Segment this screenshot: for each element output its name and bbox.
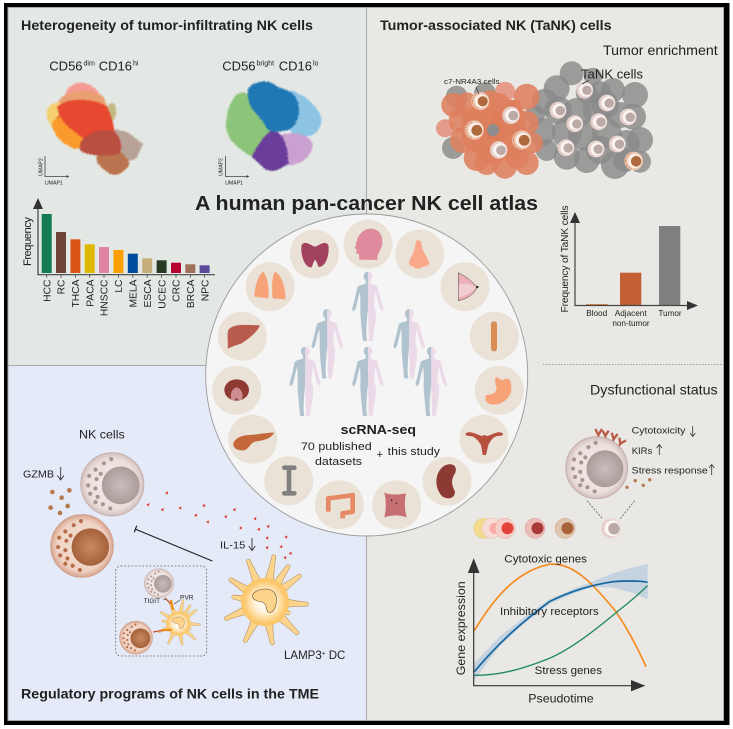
icon: nose <box>409 240 429 269</box>
heading: regulatory programs: Regulatory programs of NK cells in the TME <box>21 685 319 701</box>
label: CD56dim CD16hi: CD56 <box>49 59 83 74</box>
central circle: atlas <box>206 214 528 536</box>
label: scRNA-seq: scRNA-seq <box>341 423 416 437</box>
UMAP: CD56bright clusters <box>226 81 322 171</box>
UMAP: CD56dim clusters <box>47 83 143 175</box>
icon: skin <box>384 493 407 517</box>
bar chart: cancer type frequency: RC <box>57 279 68 294</box>
label: c7-NR4A3 cells: c7-NR4A3 cells <box>444 77 500 86</box>
UMAP axes, right: UMAP1 <box>225 180 243 186</box>
title: A human pan-cancer NK cell atlas: A human pan-cancer NK cell atlas <box>195 193 538 215</box>
arrow: down <box>690 426 695 436</box>
icon: lungs <box>254 272 285 299</box>
line chart: gene expression over pseudotime <box>454 553 648 705</box>
panel: heterogeneity of tumor-infiltrating NK cells <box>8 8 366 366</box>
label: GZMB down: GZMB <box>23 469 54 481</box>
line chart: gene expression over pseudotime: Inhibitory receptors <box>500 606 599 618</box>
bar chart: cancer type frequency: MELA <box>128 279 140 308</box>
NK cell, gray <box>81 453 144 516</box>
icon: esophagus <box>491 321 497 351</box>
inset: TIGIT PVR interaction: TIGIT <box>144 599 160 605</box>
label: tumor enrichment: Tumor enrichment <box>603 42 718 58</box>
line chart: gene expression over pseudotime: Cytotoxic genes <box>504 553 588 565</box>
bar chart: frequency of TaNK cells: Frequency of TaNK cells <box>560 206 571 312</box>
bar chart: cancer type frequency: HCC <box>42 279 53 302</box>
bar chart: cancer type frequency: LC <box>114 279 125 293</box>
bar chart: frequency of TaNK cells: Tumor <box>658 309 682 318</box>
heading: heterogeneity: Heterogeneity of tumor-infiltrating NK cells <box>21 17 313 33</box>
panel: tumor-associated NK cells <box>366 8 724 720</box>
bar chart: cancer type frequency: UCEC <box>157 279 168 309</box>
arrow: up <box>709 464 714 475</box>
UMAP axes, right <box>218 156 248 186</box>
line chart: gene expression over pseudotime: Gene expression <box>454 581 468 675</box>
bar chart: frequency of TaNK cells: non-tumor <box>612 319 650 328</box>
label: NK cells: NK cells <box>79 427 125 441</box>
icon: kidney <box>436 464 456 498</box>
bar chart: cancer type frequency: THCA <box>71 279 82 308</box>
label: CD56bright CD16lo: lo <box>313 61 319 68</box>
NK cell, brown <box>51 515 113 577</box>
icon: pancreas <box>233 433 274 450</box>
bar chart: cancer type frequency: BRCA <box>186 279 197 308</box>
label: CD56dim CD16hi: hi <box>133 61 139 68</box>
icon: prostate <box>224 379 249 401</box>
human figures <box>290 272 447 416</box>
label: 70 published datasets: datasets <box>315 456 362 468</box>
UMAP axes, left: UMAP2 <box>38 158 44 176</box>
label: plus this study <box>376 446 440 461</box>
arrow: IL-15 down <box>249 538 255 550</box>
UMAP axes, left: UMAP1 <box>45 180 63 186</box>
label: CD56dim CD16hi: dim <box>84 61 95 68</box>
icon: colon <box>328 495 353 518</box>
label: CD56dim CD16hi: CD16 <box>99 59 132 74</box>
panel: regulatory programs of NK cells <box>8 366 366 720</box>
icon: breast <box>458 273 478 301</box>
dysfunctional NK cell illustration <box>566 429 651 519</box>
bar chart: cancer type frequency: CRC <box>172 279 183 302</box>
arrow: up <box>657 444 662 455</box>
line chart: gene expression over pseudotime: Pseudotime <box>528 691 594 705</box>
inset: TIGIT PVR interaction: PVR <box>180 595 194 601</box>
text: stress response up: Stress response <box>632 465 708 476</box>
label: LAMP3+ DC: LAMP3 <box>284 650 322 662</box>
bar chart: frequency of TaNK cells: Blood <box>586 309 608 318</box>
granzyme dots <box>48 488 72 515</box>
organ backgrounds <box>212 220 524 529</box>
line chart: gene expression over pseudotime: Stress genes <box>535 665 603 677</box>
IL-15 particles <box>146 491 292 559</box>
NK cell state row <box>474 518 622 538</box>
label: CD56bright CD16lo: CD16 <box>279 59 312 74</box>
bar chart: cancer type frequency: NPC <box>200 279 211 301</box>
arrow: GZMB down <box>57 467 64 480</box>
bar chart: frequency of TaNK cells: Adjacent <box>615 309 647 318</box>
heading: TaNK: Tumor-associated NK (TaNK) cells <box>380 17 612 33</box>
UMAP axes, left <box>38 156 68 186</box>
inhibition arrow <box>134 526 212 561</box>
organ icons <box>224 229 511 518</box>
icon: uterus <box>466 432 503 455</box>
icon: liver <box>228 325 260 349</box>
icon: thyroid <box>301 243 329 267</box>
icon: bone <box>282 465 297 496</box>
tumor cell cluster illustration <box>436 61 653 179</box>
bar chart: cancer type frequency <box>22 198 215 316</box>
text: KIRs up: KIRs <box>632 446 653 457</box>
bar chart: frequency of TaNK cells <box>560 206 698 328</box>
label: LAMP3+ DC: DC <box>326 650 345 662</box>
label: CD56bright CD16lo: CD56 <box>222 59 256 74</box>
label: LAMP3+ DC: + <box>322 650 326 658</box>
label: TaNK cells: TaNK cells <box>581 67 643 82</box>
bar chart: cancer type frequency: ESCA <box>143 279 154 308</box>
bar chart: cancer type frequency: Frequency <box>22 217 34 266</box>
label: 70 published datasets: 70 published <box>301 441 372 453</box>
label: IL-15 down: IL-15 <box>220 539 245 551</box>
label: CD56bright CD16lo: bright <box>256 61 274 68</box>
icon: head <box>354 229 382 260</box>
label: 70 published datasets <box>301 441 372 468</box>
label: plus this study: this study <box>388 446 440 458</box>
bar chart: cancer type frequency: HNSCC <box>100 279 111 316</box>
label: plus this study: + <box>376 449 383 461</box>
LAMP3+ dendritic cell <box>223 554 309 646</box>
UMAP axes, right: UMAP2 <box>218 158 224 176</box>
label: dysfunctional status: Dysfunctional status <box>590 381 718 397</box>
icon: stomach <box>485 377 511 405</box>
text: cytotoxicity down: Cytotoxicity <box>632 425 686 436</box>
bar chart: cancer type frequency: PACA <box>85 279 96 307</box>
inset: TIGIT PVR interaction <box>116 566 207 656</box>
